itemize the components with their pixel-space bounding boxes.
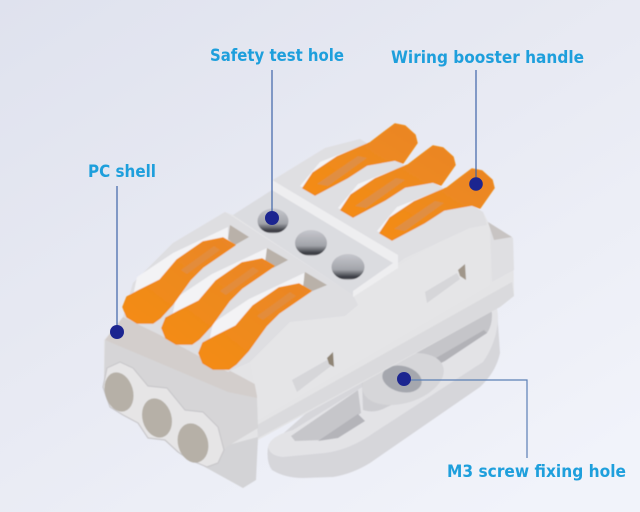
ramp 2	[172, 248, 267, 329]
label: Safety test hole	[210, 46, 344, 65]
pocket 1	[228, 225, 249, 245]
body silhouette	[104, 139, 514, 488]
hole 3	[332, 254, 364, 280]
callout: safety test hole	[210, 46, 344, 225]
back ramps	[300, 147, 445, 239]
front side window slot	[327, 352, 334, 367]
back side window slot	[458, 264, 466, 280]
back handle 3	[380, 169, 494, 240]
test holes	[258, 208, 364, 280]
back ramp 3	[377, 192, 445, 239]
front handle 3	[199, 284, 311, 369]
port 1	[100, 369, 138, 415]
dot	[265, 211, 279, 225]
right recess floor	[436, 330, 487, 363]
front face	[104, 340, 258, 467]
port 2	[138, 395, 176, 441]
dot	[110, 325, 124, 339]
leader line	[475, 70, 477, 184]
back orange handles	[303, 124, 494, 240]
port collar	[103, 362, 224, 467]
front cover top	[123, 212, 358, 372]
ramp 3	[209, 273, 304, 354]
dot	[469, 177, 483, 191]
hole 1	[258, 208, 288, 234]
connector product photo	[100, 124, 514, 488]
back handle 2	[341, 146, 455, 217]
screw hole	[379, 362, 425, 396]
screw pillar top	[356, 344, 450, 414]
mounting foot	[268, 297, 500, 478]
front handle grooves	[181, 246, 296, 320]
foot top lip	[268, 297, 498, 457]
lower side band	[257, 282, 514, 438]
label: PC shell	[88, 162, 156, 181]
right recess wall	[413, 308, 492, 362]
pocket 2	[265, 248, 288, 268]
callout: PC shell	[88, 162, 156, 339]
port 3	[173, 420, 213, 466]
callout: M3 screw fixing hole	[397, 372, 626, 481]
leader line	[116, 186, 118, 332]
front handle 1	[123, 238, 235, 323]
back handle 1	[303, 124, 417, 195]
front side window	[292, 360, 331, 392]
front handle 2	[162, 259, 274, 344]
right side face	[250, 217, 490, 420]
connector body	[100, 124, 514, 488]
ear top	[488, 222, 512, 240]
front pockets and ramps	[133, 225, 327, 354]
wire entry ports	[100, 362, 224, 467]
back ramp 2	[338, 169, 406, 216]
foot outer wall	[268, 297, 500, 478]
callout: wiring booster handle	[391, 48, 584, 191]
lower block front face	[205, 437, 258, 488]
back ramp 1	[300, 147, 368, 194]
leader line	[271, 70, 273, 218]
back side window	[425, 273, 460, 303]
screw pillar wall	[362, 372, 436, 411]
back cover top	[273, 139, 487, 263]
center plate	[233, 190, 398, 295]
leader line	[404, 380, 527, 458]
side ear	[488, 222, 514, 282]
label: M3 screw fixing hole	[447, 462, 626, 481]
ramp 1	[133, 227, 228, 308]
center plate edge	[272, 180, 398, 297]
label: Wiring booster handle	[391, 48, 584, 67]
back handle grooves	[317, 156, 444, 231]
front top strip	[105, 317, 262, 398]
front orange handles	[123, 238, 311, 369]
left recess floor	[318, 414, 365, 441]
hole 2	[295, 230, 327, 256]
dot	[397, 372, 411, 386]
pocket 3	[303, 272, 327, 292]
left recess wall	[291, 390, 361, 441]
